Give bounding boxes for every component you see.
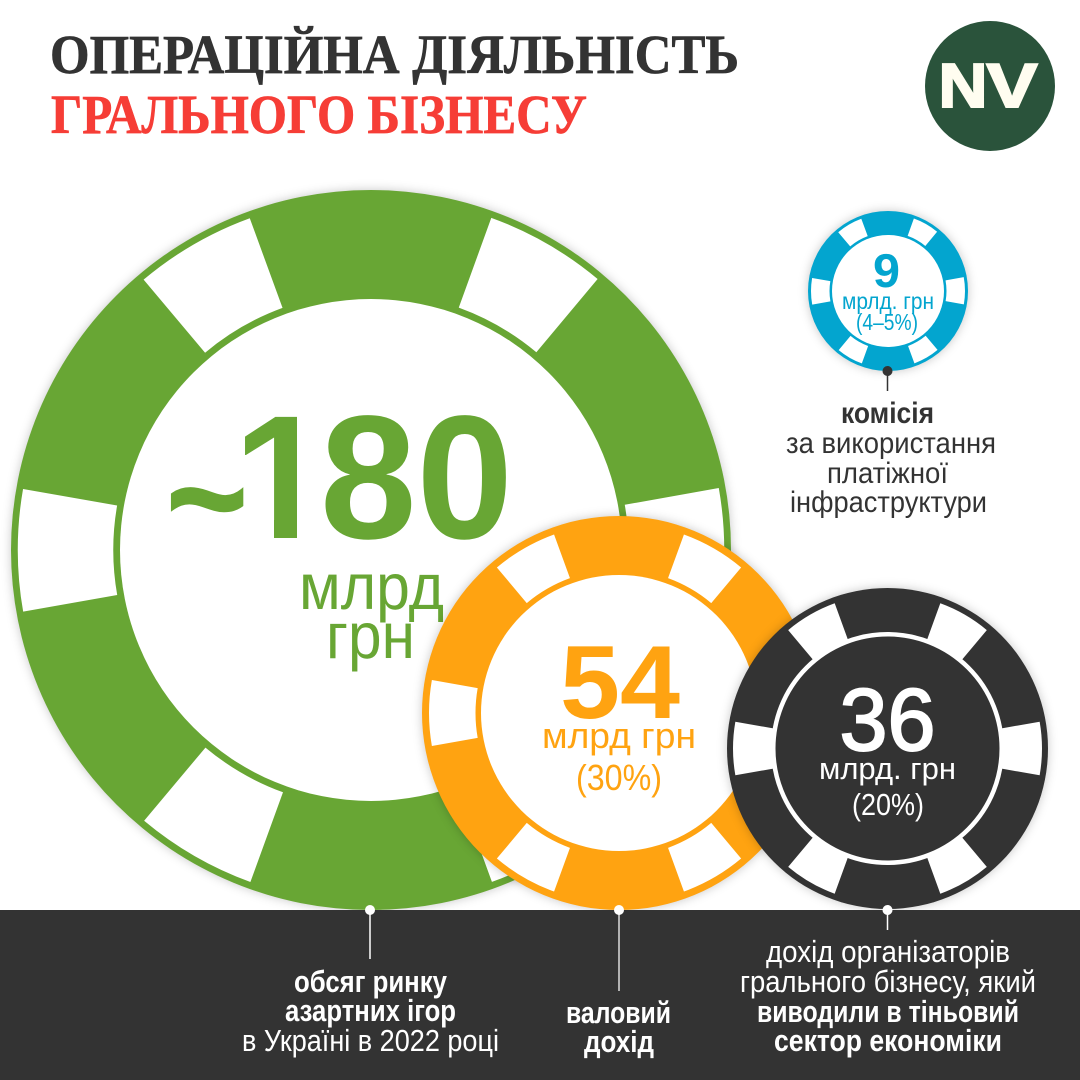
caption: market volume: в Україні в 2022 році: [242, 1023, 499, 1058]
callout: commission pointer and text: за використання: [786, 427, 996, 460]
orange chip: gross revenue: [422, 516, 816, 910]
caption: organisers income: сектор економіки: [774, 1023, 1002, 1058]
title: ОПЕРАЦІЙНА ДІЯЛЬНІСТЬ: [50, 24, 739, 85]
dark chip: shadow sector income: млрд. грн: [819, 751, 956, 786]
dark chip: shadow sector income: 36: [840, 670, 936, 769]
caption: organisers income: грального бізнесу, який: [740, 964, 1036, 999]
orange chip: gross revenue: млрд грн: [542, 715, 696, 756]
caption: organisers income: дохід організаторів: [766, 934, 1010, 969]
caption: market volume: азартних ігор: [285, 993, 456, 1028]
title: ГРАЛЬНОГО БІЗНЕСУ: [51, 84, 587, 145]
green chip: market volume: 80: [320, 380, 513, 576]
blue chip: commission: [808, 211, 968, 371]
blue chip: commission: (4–5%): [856, 309, 918, 335]
bottom band: [0, 910, 1080, 1080]
icon: NV logo: N: [938, 52, 988, 121]
callout: commission pointer and text: інфраструктури: [790, 486, 987, 519]
callout: commission pointer and text: платіжної: [827, 457, 949, 490]
dark chip: shadow sector income: [727, 588, 1048, 909]
orange chip: gross revenue: (30%): [576, 757, 662, 798]
orange chip: gross revenue: 54: [560, 625, 680, 741]
caption: market volume: обсяг ринку: [294, 964, 448, 999]
caption: market volume: [242, 905, 499, 1058]
caption: organisers income: виводили в тіньовий: [757, 994, 1019, 1029]
green chip: market volume: [11, 190, 731, 910]
caption: gross revenue: дохід: [584, 1024, 654, 1059]
caption: organisers income: [740, 905, 1036, 1058]
blue chip: commission: 9: [873, 244, 900, 297]
green chip: market volume: 1: [233, 380, 331, 576]
callout: commission pointer and text: комісія: [841, 397, 934, 430]
blue chip: commission: мрлд. грн: [842, 288, 934, 314]
dark chip: shadow sector income: (20%): [852, 787, 924, 822]
green chip: market volume: грн: [326, 599, 415, 672]
callout: commission pointer and text: [786, 366, 996, 519]
caption: gross revenue: [566, 905, 671, 1059]
icon: NV logo: [925, 21, 1055, 151]
caption: gross revenue: валовий: [566, 995, 671, 1030]
title: [50, 24, 739, 145]
icon: NV logo: V: [986, 52, 1038, 121]
green chip: market volume: ~: [167, 419, 247, 576]
green chip: market volume: млрд: [299, 550, 444, 623]
